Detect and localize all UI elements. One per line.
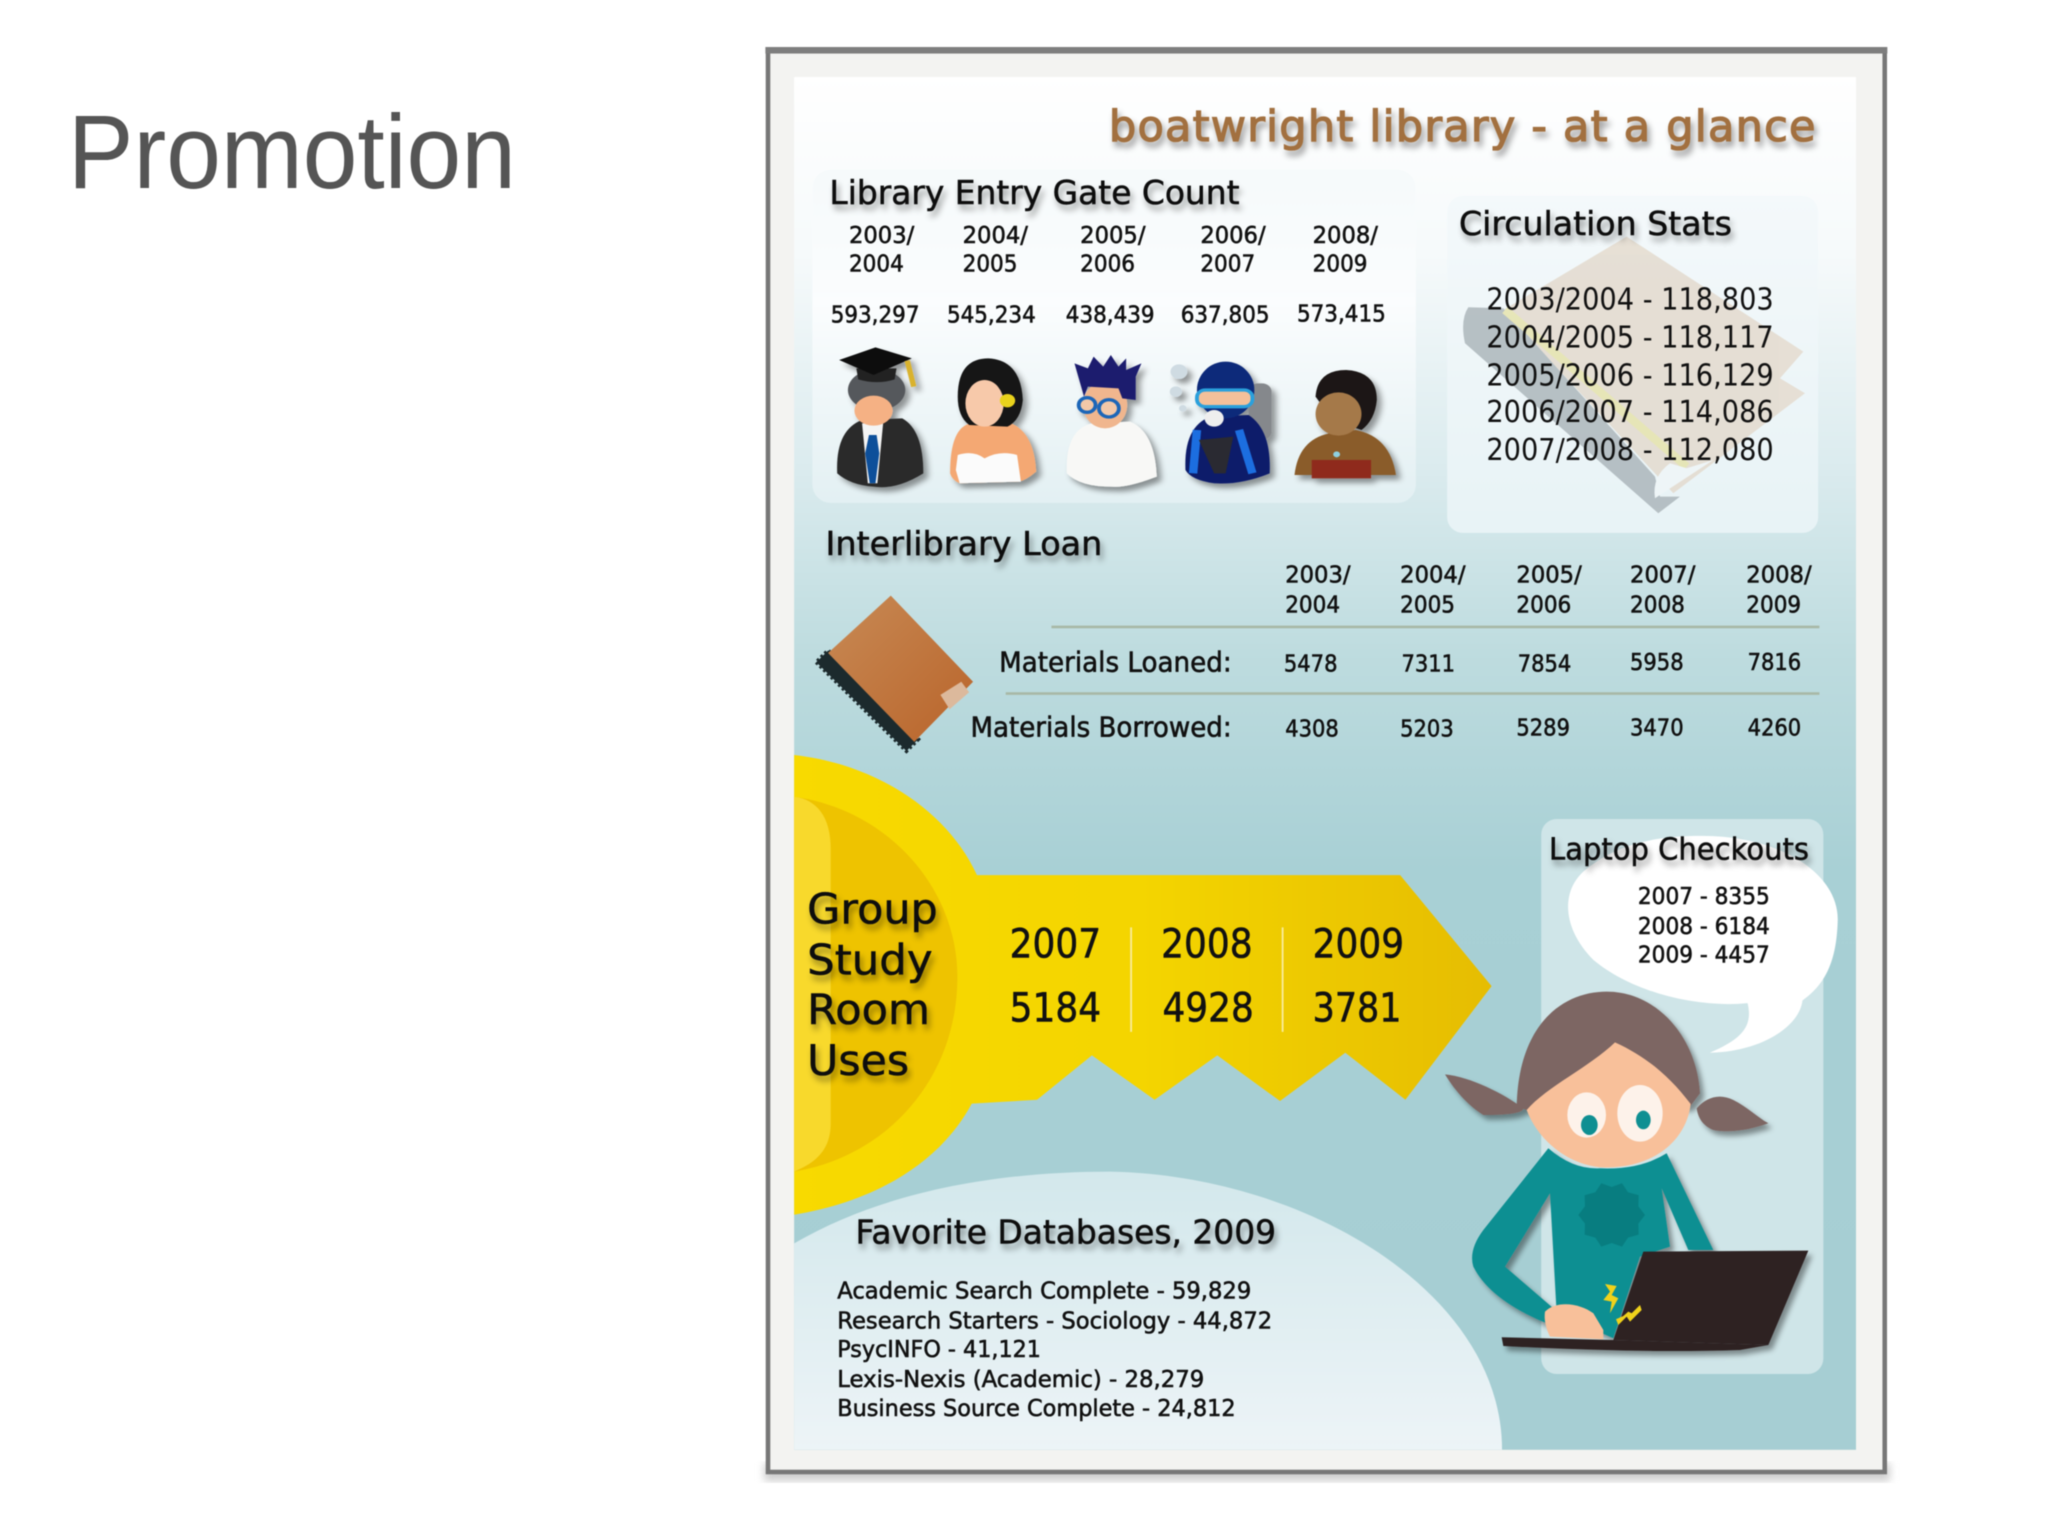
key years and counts: 4928 (1162, 983, 1254, 1031)
heading: circulation: Circulation Stats (1459, 205, 1732, 243)
loan table years: 2004 (1285, 591, 1340, 619)
girl face (1527, 1042, 1691, 1167)
row: materials loaned: 7311 (1401, 649, 1455, 677)
database list: Academic Search Complete - 59,829 (837, 1276, 1251, 1304)
gate count values: 593,297 (831, 301, 920, 329)
gate count years: 2007 (1200, 250, 1255, 278)
poster background panel (794, 77, 1856, 1450)
key years and counts (1010, 919, 1404, 1031)
loan table years: 2008 (1630, 591, 1685, 619)
icon: scientist (1067, 355, 1157, 487)
icon: woman in brown (1295, 370, 1396, 478)
heading: interlibrary loan: Interlibrary Loan (825, 525, 1102, 563)
row: materials borrowed: Materials Borrowed: (970, 713, 1232, 744)
laptop figures: 2009 - 4457 (1638, 941, 1770, 969)
row: materials borrowed: 5289 (1516, 713, 1570, 741)
girl hand (1545, 1304, 1603, 1339)
icon: brown book (816, 596, 973, 751)
row: materials loaned: Materials Loaned: (999, 647, 1232, 678)
database list: Research Starters - Sociology - 44,872 (837, 1306, 1272, 1334)
gate count people icons (837, 347, 1396, 487)
key heading (807, 884, 938, 1085)
key years and counts: 2007 (1010, 919, 1101, 967)
gate count values: 545,234 (947, 301, 1036, 329)
gate count years: 2008/ (1313, 221, 1378, 249)
icon: diver (1170, 362, 1272, 484)
icon: graduate (837, 347, 923, 487)
gate count years (849, 221, 1378, 278)
girl hair and pigtails (1445, 992, 1768, 1131)
key heading: Study (807, 935, 933, 984)
laptop figures (1638, 882, 1770, 969)
circulation figures: 2003/2004 - 118,803 (1486, 283, 1774, 318)
girl eyes (1567, 1085, 1663, 1142)
panel: library entry gate count (812, 170, 1416, 503)
poster frame (764, 47, 1890, 1481)
chest emblem (1578, 1183, 1645, 1247)
gate count values (831, 299, 1386, 329)
row: materials borrowed: 4308 (1285, 715, 1339, 743)
panel: circulation stats (1447, 196, 1818, 533)
loan table years: 2006 (1516, 591, 1571, 619)
girl body (1472, 1148, 1713, 1338)
gate count values: 637,805 (1181, 301, 1270, 329)
loan table years: 2009 (1746, 591, 1801, 619)
gate count values: 438,439 (1066, 301, 1155, 329)
row: materials loaned: 5478 (1284, 649, 1337, 677)
key heading: Group (807, 884, 938, 933)
laptop (1502, 1251, 1808, 1351)
gate count values: 573,415 (1297, 299, 1386, 327)
icon: bride (950, 358, 1036, 483)
gate count years: 2006 (1080, 250, 1135, 278)
gate count years: 2005/ (1080, 221, 1146, 249)
laptop figures: 2008 - 6184 (1638, 912, 1770, 940)
row: materials loaned: 5958 (1630, 648, 1684, 676)
row: materials loaned (999, 647, 1801, 678)
keyboard sparks (1603, 1284, 1642, 1325)
panel: group study room key (794, 755, 1492, 1215)
poster title: boatwright library - at a glance (1109, 102, 1816, 152)
database list: PsycINFO - 41,121 (837, 1335, 1041, 1363)
loan table years: 2004/ (1400, 561, 1466, 589)
panel: favorite databases (794, 1172, 1502, 1450)
row: materials loaned: 7816 (1748, 648, 1801, 676)
gate count years: 2004/ (963, 221, 1028, 249)
loan table rules (1006, 626, 1819, 695)
key years and counts: 5184 (1010, 983, 1101, 1031)
gate count years: 2004 (849, 250, 904, 278)
heading: gate count: Library Entry Gate Count (829, 174, 1240, 212)
laptop figures: 2007 - 8355 (1638, 882, 1770, 910)
loan table years (1285, 561, 1812, 619)
gate count years: 2005 (963, 250, 1017, 278)
illustration: girl with laptop (1445, 992, 1808, 1351)
gate count years: 2009 (1313, 250, 1368, 278)
database list (837, 1276, 1272, 1422)
row: materials borrowed: 3470 (1630, 713, 1684, 741)
key heading: Uses (807, 1036, 909, 1085)
circulation figures (1486, 283, 1774, 468)
database list: Lexis-Nexis (Academic) - 28,279 (837, 1365, 1204, 1393)
icon: faded book (1463, 237, 1805, 513)
key years and counts: 3781 (1313, 983, 1401, 1031)
slide title: Promotion (68, 94, 516, 211)
circulation figures: 2005/2006 - 116,129 (1486, 358, 1774, 393)
key years and counts: 2008 (1161, 919, 1253, 967)
row: materials borrowed: 5203 (1400, 715, 1454, 743)
loan table years: 2007/ (1630, 561, 1695, 589)
circulation figures: 2004/2005 - 118,117 (1486, 320, 1774, 355)
gate count years: 2003/ (849, 221, 914, 249)
circulation figures: 2006/2007 - 114,086 (1486, 395, 1774, 430)
database list: Business Source Complete - 24,812 (837, 1394, 1236, 1422)
loan table years: 2005/ (1516, 561, 1582, 589)
row: materials borrowed: 4260 (1748, 713, 1801, 741)
key heading: Room (807, 985, 930, 1034)
row: materials borrowed (970, 713, 1801, 744)
loan table years: 2005 (1400, 591, 1455, 619)
speech bubble (1568, 836, 1838, 1053)
circulation figures: 2007/2008 - 112,080 (1486, 433, 1774, 468)
loan table years: 2003/ (1285, 561, 1351, 589)
row: materials loaned: 7854 (1518, 649, 1571, 677)
panel: interlibrary loan (816, 525, 1819, 751)
key years and counts: 2009 (1313, 919, 1404, 967)
gate count years: 2006/ (1200, 221, 1266, 249)
key graphic (794, 755, 1492, 1215)
loan table years: 2008/ (1746, 561, 1812, 589)
heading: laptop checkouts: Laptop Checkouts (1549, 832, 1809, 867)
panel: laptop checkouts (1445, 819, 1838, 1374)
heading: favorite databases: Favorite Databases, 2009 (856, 1213, 1276, 1251)
